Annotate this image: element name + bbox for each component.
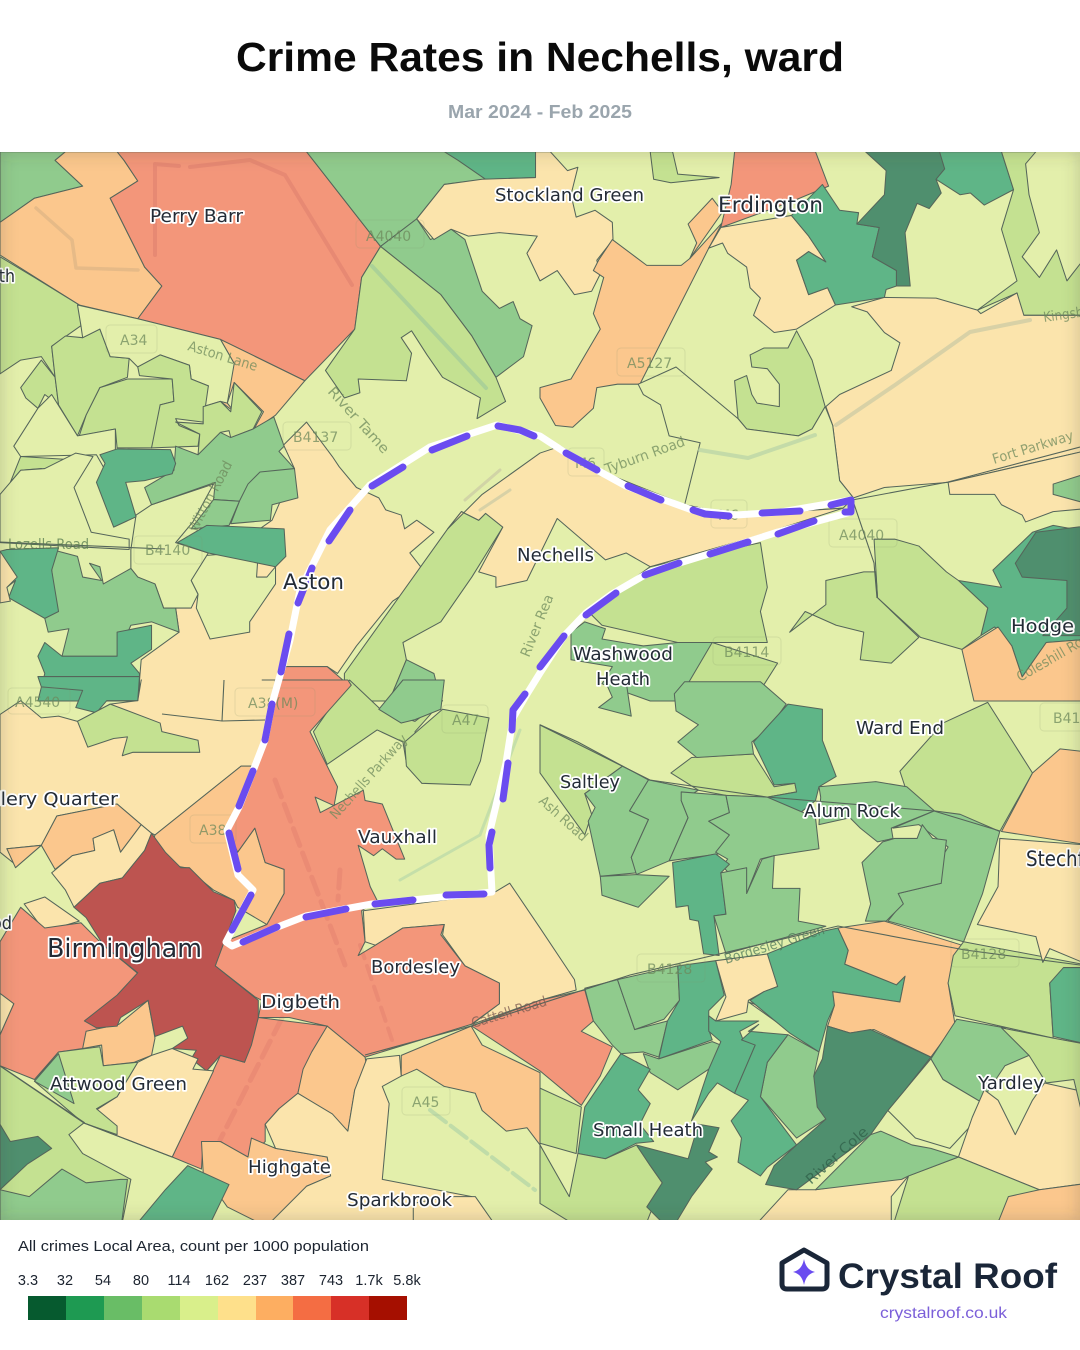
map roads and rivers	[36, 160, 1030, 1190]
road number shields and road names: Nechells Parkway	[327, 732, 411, 823]
road number shields and road names: A4540	[15, 695, 60, 711]
legend title: All crimes Local Area, count per 1000 population	[18, 1239, 369, 1255]
legend scale values	[18, 1273, 421, 1289]
road number shields and road names: B4137	[293, 430, 338, 446]
place name labels: Saltley	[560, 772, 620, 793]
map quadrant: south-east areas	[472, 682, 1080, 1231]
road number shields and road names: M6	[575, 456, 596, 472]
legend	[18, 1239, 421, 1320]
title: Crime Rates in Nechells, ward	[236, 34, 844, 80]
place name labels: Washwood	[573, 644, 673, 665]
legend scale values: 5.8k	[393, 1273, 421, 1289]
place name labels: Sparkbrook	[347, 1190, 453, 1211]
road number shields and road names: Bordesley Green	[722, 922, 827, 968]
legend scale values: 114	[167, 1273, 191, 1289]
map quadrant: south-west areas	[0, 676, 576, 1231]
road number shields and road names: Lozells Road	[8, 537, 89, 553]
road number shields and road names: Cattell Road	[469, 994, 549, 1032]
road number shields and road names: Witton Road	[185, 458, 236, 535]
place name labels: Birmingham	[47, 934, 202, 964]
road number shields and road names: B4140	[145, 543, 190, 559]
road number shields and road names: Aston Lane	[186, 339, 259, 375]
legend scale values: 54	[95, 1273, 111, 1289]
road number shields and road names: A4040	[839, 528, 884, 544]
legend scale values: 743	[319, 1273, 343, 1289]
road number shields and road names: B4128	[961, 947, 1006, 963]
legend scale values: 32	[57, 1273, 73, 1289]
road number shields and road names: Ash Road	[535, 793, 591, 845]
subtitle: date range: Mar 2024 - Feb 2025	[448, 102, 632, 122]
road number shields and road names: M6	[718, 508, 739, 524]
road number shields and road names: A47	[452, 713, 479, 729]
logo url: crystalroof.co.uk	[880, 1305, 1008, 1322]
place name labels: Ward End	[856, 718, 944, 739]
legend scale values: 237	[243, 1273, 267, 1289]
place name labels: Erdington	[718, 193, 823, 217]
place name labels: Small Heath	[593, 1120, 703, 1141]
road number shields and road names: B4114	[724, 645, 769, 661]
map quadrant: north-west areas	[0, 152, 536, 701]
place name labels: Yardley	[977, 1073, 1044, 1094]
road number shields and road names	[8, 220, 1080, 1188]
road number shields and road names: A34	[120, 333, 147, 349]
place name labels: Highgate	[248, 1157, 331, 1178]
place name labels: Nechells	[517, 545, 594, 566]
place name labels: Vauxhall	[358, 827, 437, 848]
logo: Crystal Roof	[782, 1250, 1057, 1322]
road number shields and road names: Tyburn Road	[602, 434, 687, 478]
legend scale values: 1.7k	[355, 1273, 383, 1289]
place name labels: Bordesley	[371, 957, 460, 978]
logo wordmark: Crystal Roof	[838, 1257, 1057, 1296]
legend scale values: 80	[133, 1273, 149, 1289]
place name labels: Alum Rock	[804, 801, 901, 822]
road number shields and road names: A5127	[627, 356, 672, 372]
road number shields and road names: River Tame	[324, 384, 392, 457]
road number shields and road names: Fort Parkway	[990, 428, 1075, 468]
place name labels: Stockland Green	[495, 185, 644, 206]
road number shields and road names: A4040	[366, 229, 411, 245]
place name labels: Digbeth	[261, 992, 340, 1013]
legend colour swatches	[28, 1296, 407, 1320]
road number shields and road names: A45	[412, 1095, 439, 1111]
road number shields and road names: River Rea	[518, 592, 557, 659]
legend scale values: 162	[205, 1273, 229, 1289]
legend scale values: 3.3	[18, 1273, 38, 1289]
road number shields and road names: A38(M)	[248, 696, 298, 712]
icon: house with star	[782, 1250, 827, 1289]
road number shields and road names: River Cole	[803, 1124, 872, 1188]
place name labels	[0, 185, 1080, 1211]
legend scale values: 387	[281, 1273, 305, 1289]
place name labels: Heath	[596, 669, 650, 690]
ward boundary: white line with purple dashes	[226, 425, 851, 946]
road number shields and road names: B41	[1053, 711, 1080, 727]
map quadrant: north-east areas	[417, 152, 1080, 701]
road number shields and road names: A38	[199, 823, 226, 839]
map main boundary lines	[0, 447, 1080, 1157]
place name labels: Attwood Green	[50, 1074, 187, 1095]
place name labels: Aston	[283, 570, 344, 594]
road number shields and road names: B4128	[647, 962, 692, 978]
place name labels: Perry Barr	[150, 206, 244, 227]
